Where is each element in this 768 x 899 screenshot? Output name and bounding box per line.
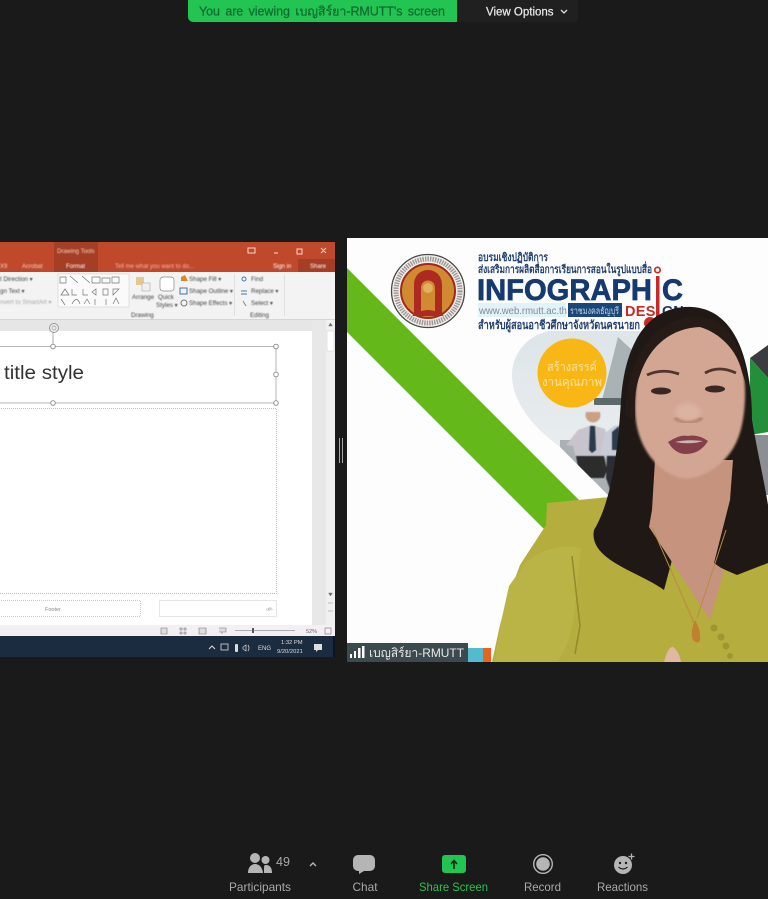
record button: Record	[524, 880, 561, 894]
workshop heading: GN	[662, 304, 684, 320]
title bar and ribbon tabs	[0, 242, 335, 272]
hand	[664, 647, 681, 662]
top banner: viewing status: View Options	[486, 6, 554, 18]
title bar and ribbon tabs: X9	[0, 264, 8, 270]
institution seal	[392, 254, 464, 328]
chat button	[352, 855, 378, 894]
eyes	[651, 388, 671, 394]
ribbon: Shape Outline ▾	[189, 288, 233, 295]
participants button: 49	[276, 855, 290, 869]
rotate handle	[50, 324, 58, 332]
reactions button	[597, 854, 648, 894]
Thai heading lines: สำหรับผู้สอนอาชีวศึกษาจังหวัดนครนายก	[478, 318, 640, 333]
ribbon: Shape Fill ▾	[189, 276, 221, 283]
title bar and ribbon tabs: Drawing Tools	[57, 249, 95, 255]
ribbon: Find	[251, 276, 264, 283]
URL strip	[478, 303, 566, 317]
workshop heading: www.web.rmutt.ac.th	[478, 306, 567, 317]
slide canvas	[0, 320, 335, 625]
title bar and ribbon tabs: Format	[66, 264, 85, 270]
status bar	[0, 625, 335, 636]
yellow badge: สร้างสรรค์	[547, 360, 597, 374]
yellow badge: งานคุณภาพ	[542, 375, 602, 390]
Thai heading lines: ส่งเสริมการผลิตสื่อการเรียนการสอนในรูปแบบสื่อ	[478, 261, 652, 277]
ribbon	[0, 272, 335, 320]
buttons	[710, 624, 733, 659]
windows taskbar: 9/20/2021	[277, 649, 303, 655]
ribbon: t Direction ▾	[0, 276, 33, 283]
necklace	[652, 527, 726, 625]
presenter	[492, 307, 768, 662]
nose	[675, 418, 702, 422]
bottom strip colours	[468, 648, 491, 662]
participant name tag	[347, 643, 468, 662]
title bar and ribbon tabs: Tell me what you want to do...	[115, 264, 194, 270]
title bar and ribbon tabs: Acrobat	[22, 264, 43, 270]
reactions button: Reactions	[597, 880, 648, 894]
workshop heading	[477, 251, 684, 333]
photo backdrop	[512, 331, 642, 495]
ribbon: nvert to SmartArt ▾	[0, 299, 52, 306]
ribbon: Arrange	[132, 294, 155, 301]
title placeholder: title style	[4, 363, 84, 384]
DESIGN wordmark: DES	[625, 304, 656, 320]
footer placeholder	[0, 600, 140, 616]
Thai heading lines: อบรมเชิงปฏิบัติการ	[478, 251, 548, 264]
hair back	[594, 307, 768, 590]
ribbon: Select ▾	[251, 300, 273, 307]
windows taskbar: 1:32 PM	[281, 640, 303, 646]
blazer	[492, 497, 768, 662]
toolbar: zoom meeting controls	[229, 853, 648, 894]
title placeholder	[0, 344, 278, 405]
participants button: Participants	[229, 880, 291, 894]
panel divider handle	[340, 438, 342, 463]
ribbon: Styles ▾	[156, 302, 178, 309]
ribbon: Shape Effects ▾	[189, 300, 232, 307]
ribbon: Replace ▾	[251, 288, 279, 295]
top banner: viewing status	[188, 0, 578, 22]
INFOGRAPHIC wordmark: INFOGRAPH	[477, 274, 652, 307]
workshop heading: C	[662, 274, 683, 307]
slide number placeholder: ‹#›	[266, 607, 273, 613]
mouth	[668, 436, 708, 454]
green diagonal band	[347, 268, 582, 530]
ribbon: Drawing	[131, 312, 154, 319]
neck and chest	[649, 460, 733, 620]
ribbon: Editing	[250, 312, 269, 319]
title bar and ribbon tabs: Share	[310, 264, 327, 270]
content placeholder	[0, 408, 276, 594]
photographed men	[566, 405, 624, 492]
participant name tag: เบญสิร์ยา-RMUTT	[369, 646, 465, 660]
chat button: Chat	[352, 880, 378, 894]
ribbon: gn Text ▾	[0, 288, 25, 295]
record button	[524, 855, 561, 894]
panel: PowerPoint window	[0, 242, 335, 657]
yellow badge	[538, 338, 606, 408]
slide number placeholder	[160, 600, 276, 616]
workshop heading: ราชมงคลธัญบุรี	[570, 305, 619, 317]
ribbon: Quick	[158, 294, 175, 301]
vertical scrollbar	[326, 320, 335, 625]
panel: presenter video	[347, 238, 768, 662]
windows taskbar: ENG	[258, 646, 271, 652]
eyebrows	[647, 371, 679, 375]
share screen button: Share Screen	[419, 880, 488, 894]
right-side decorative shapes	[750, 345, 768, 378]
top banner: viewing status: You are viewing เบญสิร์ยา-RMUTT's screen	[199, 4, 445, 18]
hair fringe	[634, 324, 746, 420]
face	[635, 325, 745, 478]
title bar and ribbon tabs: Sign in	[273, 264, 291, 270]
share screen button	[419, 855, 488, 894]
status bar: 52%	[306, 629, 317, 635]
windows taskbar	[0, 636, 335, 657]
footer placeholder: Footer	[45, 607, 61, 613]
participants menu arrow	[310, 863, 316, 866]
participants button	[229, 853, 291, 894]
Thai heading lines	[478, 251, 652, 333]
